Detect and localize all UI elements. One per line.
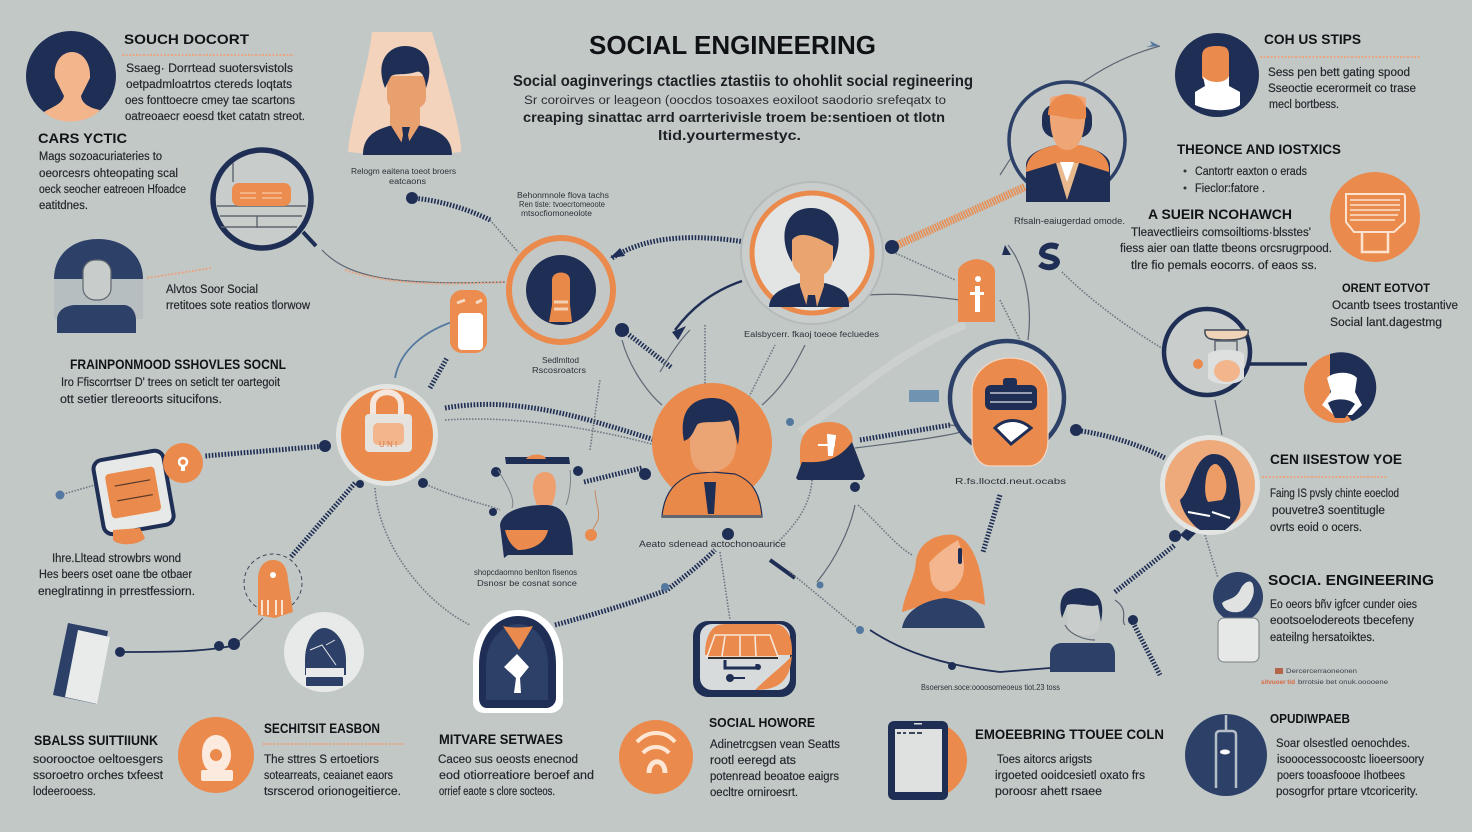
tiny note: brrotsie bet onuk.ooooene xyxy=(1298,679,1388,686)
icon: wifi circle xyxy=(619,720,693,794)
panel: theonce and iostxics xyxy=(1177,141,1341,195)
caption: hooded figure: Dsnosr be cosnat sonce xyxy=(477,579,578,588)
icon: magnifier with orange card xyxy=(213,150,316,248)
icon: padlock circle: U N I xyxy=(379,440,397,449)
icon: framed man portrait xyxy=(741,182,883,324)
panel: social howore xyxy=(709,715,840,799)
tiny note: Dercercerraoneonen xyxy=(1286,668,1357,675)
text block: ssoroetro orches txfeest xyxy=(33,770,164,782)
icon: shopping cart panel xyxy=(693,621,796,697)
heading: MITVARE SETWAES xyxy=(439,731,563,747)
text block: fiess aier oan tlatte tbeons orcsrugrpood. xyxy=(1120,243,1332,255)
panel: sechitsit easbon xyxy=(178,717,404,798)
icon: man portrait xyxy=(348,32,461,155)
icon: cap shape xyxy=(796,422,865,480)
text block: eootsoelodereots tbecefeny xyxy=(1270,615,1414,627)
caption: orange ring top: Ren tiste: tvoecrtomeoote xyxy=(519,200,606,209)
heading: SOCIA. ENGINEERING xyxy=(1268,572,1434,589)
heading: OPUDIWPAEB xyxy=(1270,711,1350,726)
text block: isooocessocoostc lioeersoory xyxy=(1277,754,1424,766)
blue connector dots xyxy=(56,41,1160,634)
text block xyxy=(1276,738,1424,798)
text block xyxy=(710,739,840,799)
text block xyxy=(33,754,164,798)
intro text: creaping sinattac arrd oarrterivisle troem be:sentioen ot tlotn xyxy=(523,109,945,125)
intro text: Sr coroirves or leageon (oocdos tosoaxes eoxiloot saodorio srefeqatx to xyxy=(524,95,946,107)
connector end nodes xyxy=(115,192,1181,670)
text block: Soar olsestled oenochdes. xyxy=(1276,738,1410,750)
caption: orange ring bottom: Rscosroatcrs xyxy=(532,366,586,375)
bullet list: Fieclor:fatore . xyxy=(1195,183,1265,195)
intro text xyxy=(513,73,973,143)
caption: orange ring bottom xyxy=(532,356,586,375)
text block: soorooctoe oeltoesgers xyxy=(33,754,163,766)
small orange label tag xyxy=(450,290,487,353)
icon: collar circle xyxy=(1175,33,1259,117)
icon: orange info tag xyxy=(958,259,995,322)
text block: oetpadmloatrtos ctereds Ioqtats xyxy=(126,79,292,91)
panel: opudiwpaeb xyxy=(1185,711,1424,798)
text block: orrief eaote s clore socteos. xyxy=(439,786,555,798)
text block: ovrts eoid o ocers. xyxy=(1270,522,1362,534)
intro text: Social oaginverings ctactlies ztastiis to ohohlit social regineering xyxy=(513,73,973,90)
heading: SOUCH DOCORT xyxy=(124,31,249,47)
heading: A SUEIR NCOHAWCH xyxy=(1148,206,1292,222)
caption: orange ring top: Behonmnole flova tachs xyxy=(517,191,609,200)
caption: man portrait xyxy=(351,167,456,186)
panel: socia engineering xyxy=(1213,572,1434,686)
panel: mitvare setwaes xyxy=(438,610,594,798)
text block: Caceo sus oeosts enecnod xyxy=(438,754,578,766)
icon: woman in circle xyxy=(1160,435,1260,535)
heading: FRAINPONMOOD SSHOVLES SOCNL xyxy=(70,356,286,372)
caption: headset person: Rfsaln-eaiugerdad omode. xyxy=(1014,216,1125,226)
text block: oeck seocher eatreoen Hfoadce xyxy=(39,184,186,196)
icon: navy circle with tie xyxy=(1185,714,1267,796)
icon: tablet on orange disc xyxy=(888,721,967,800)
heading: SECHITSIT EASBON xyxy=(264,720,380,736)
heading: SOCIAL HOWORE xyxy=(709,715,815,730)
panel: social schedules xyxy=(60,356,286,406)
heading: THEONCE AND IOSTXICS xyxy=(1177,141,1341,157)
panel: cen iisestow yoe xyxy=(1160,435,1402,535)
heading: COH US STIPS xyxy=(1264,31,1361,47)
icon: padlock circle xyxy=(336,384,438,486)
panel: cars yctic xyxy=(38,130,186,212)
text block xyxy=(60,377,281,406)
icon: hooded figure xyxy=(498,454,599,558)
icon: helmet figure xyxy=(54,239,143,333)
caption: man portrait: Relogm eaitena toeot broers xyxy=(351,167,456,176)
panel: sbalss suittiiunk xyxy=(33,732,164,798)
text block: tsrscerod orionogeitierce. xyxy=(264,786,401,798)
text block: ott setier tlereoorts situcifons. xyxy=(60,394,222,406)
text block: oeorcesrs ohteopating scal xyxy=(39,168,178,180)
icon: navy badge xyxy=(473,610,563,713)
text block: sotearreats, ceaianet eaors xyxy=(264,770,393,782)
icon: headset person in ring xyxy=(1009,82,1125,202)
text block: tlre fio pemals eocorrs. of eaos ss. xyxy=(1131,260,1317,272)
text block: The sttres S ertoetiors xyxy=(264,754,379,766)
text block: Sseoctie ecerormeit co trase xyxy=(1268,83,1416,95)
caption: central person: Aeato sdenead actochonoaurice xyxy=(639,539,786,550)
text block: social note: rretitoes sote reatios tlorwow xyxy=(166,300,311,312)
heading: EMOEEBRING TTOUEE COLN xyxy=(975,726,1164,742)
text block xyxy=(125,63,305,123)
text block: Eo oeors bñv igfcer cunder oies xyxy=(1270,599,1417,611)
icon: ring with mask device xyxy=(1164,309,1250,395)
icon: dashed circle with orange hand xyxy=(244,554,302,618)
panel: a sueir ncohawch xyxy=(1120,206,1332,272)
icon: orange ring with bottle xyxy=(509,238,613,342)
caption: shield: R.fs.lloctd.neut.ocabs xyxy=(955,477,1066,486)
text block: Adinetrcgsen vean Seatts xyxy=(710,739,840,751)
icon: dollar s xyxy=(1040,246,1058,267)
text block xyxy=(1330,300,1458,329)
icon: central person xyxy=(652,383,772,518)
icon: orange document circle xyxy=(1330,172,1420,262)
heading: CEN IISESTOW YOE xyxy=(1270,451,1402,467)
tiny note: sitvuoer tid xyxy=(1261,679,1295,686)
icon: tilted monitor xyxy=(92,449,175,544)
text block: Iro Ffiscorrtser D' trees on seticlt ter oartegoit xyxy=(61,377,281,389)
heading: ORENT EOTVOT xyxy=(1342,281,1431,295)
text block: Faing IS pvsly chinte eoeclod xyxy=(1270,488,1399,500)
title: SOCIAL ENGINEERING xyxy=(589,30,876,60)
text block: poers tooasfoooe Ihotbees xyxy=(1277,770,1405,782)
text block: eod otiorreatiore beroef and xyxy=(439,770,594,782)
icon: orange webcam xyxy=(178,717,254,793)
text block xyxy=(1270,488,1399,534)
text block xyxy=(39,151,186,212)
connector network xyxy=(56,41,1222,675)
text block: pouvetre3 soentitugle xyxy=(1272,505,1385,517)
text block: mecl bortbess. xyxy=(1269,99,1339,111)
text block: social note: Alvtos Soor Social xyxy=(166,284,258,296)
icon: profile card xyxy=(1213,572,1263,662)
icon: man with headset xyxy=(1050,588,1115,672)
caption: bottom connector: Bsoersen.soce:oooosomeoeus tiot.23 toss xyxy=(921,683,1060,692)
text block: monitor: eneglratinng in prrestfessiorn. xyxy=(38,586,195,598)
text block: Ocantb tsees trostantive xyxy=(1332,300,1458,312)
text block: monitor: Hes beers oset oane tbe otbaer xyxy=(39,569,192,581)
text block xyxy=(438,754,594,798)
caption: hooded figure: shopcdaomno benlton fisenos xyxy=(474,568,577,577)
text block: monitor: Ihre.Lltead strowbrs wond xyxy=(52,553,181,565)
text block: oes fonttoecre cmey tae scartons xyxy=(125,95,295,107)
text block: lodeerooess. xyxy=(33,786,96,798)
bullet list xyxy=(1184,166,1307,195)
text block: monitor xyxy=(38,553,195,598)
icon: split orange circle xyxy=(1250,352,1376,423)
tiny note xyxy=(1261,668,1388,686)
text block: oatreoaecr eoesd tket catatn streot. xyxy=(125,111,305,123)
text block: rootl eeregd ats xyxy=(710,755,796,767)
heading: CARS YCTIC xyxy=(38,130,127,146)
text block: potenread beoatoe eaigrs xyxy=(710,771,839,783)
icon: book xyxy=(53,623,110,704)
icon: woman avatar xyxy=(26,31,116,122)
text block: irgoeted ooidcesietl oxato frs xyxy=(995,770,1145,782)
text block xyxy=(264,754,401,798)
intro text: ltid.yourtermestyc. xyxy=(658,127,801,143)
text block: Ssaeg· Dorrtead suotersvistols xyxy=(126,63,293,75)
caption: orange ring bottom: Sedlmltod xyxy=(542,356,579,365)
icon: shield with goggles xyxy=(950,341,1064,466)
text block: oecltre orniroesrt. xyxy=(710,787,798,799)
caption: framed man: Ealsbycerr. fkaoj toeoe fecluedes xyxy=(744,330,879,339)
text block xyxy=(1270,599,1417,644)
text block: Sess pen bett gating spood xyxy=(1268,67,1410,79)
icon: white circle with hood xyxy=(284,612,364,692)
text block xyxy=(1268,67,1416,111)
text block: Mags sozoacuriateries to xyxy=(39,151,162,163)
icon: orange coin xyxy=(163,443,203,483)
caption: hooded figure xyxy=(474,568,578,588)
text block: posogrfor prtare vtcoricerity. xyxy=(1276,786,1418,798)
caption: orange ring top: mtsocfiomoneolote xyxy=(521,209,593,218)
panel: coh us stips xyxy=(1175,31,1420,117)
text block: Tleavectlieirs comsoiltioms·blsstes' xyxy=(1131,227,1311,239)
text block: Toes aitorcs arigsts xyxy=(997,754,1092,766)
text block: social note xyxy=(166,284,311,312)
panel: souch docort xyxy=(26,31,305,123)
text block xyxy=(1120,227,1332,272)
bullet list: Cantortr eaxton o erads xyxy=(1195,166,1307,178)
text block xyxy=(995,754,1145,798)
icon: woman with orange hair xyxy=(902,535,985,628)
caption: orange ring top xyxy=(517,191,609,218)
panel: emoeebring ttouee coln xyxy=(975,726,1164,798)
caption: man portrait: eatcaons xyxy=(389,177,426,186)
arrowheads xyxy=(610,245,1196,541)
panel: orent eotvot xyxy=(1330,281,1458,329)
text block: Social lant.dagestmg xyxy=(1330,317,1442,329)
heading: SBALSS SUITTIIUNK xyxy=(34,732,158,748)
text block: poroosr ahett rsaee xyxy=(995,786,1102,798)
text block: eateilng hersatoiktes. xyxy=(1270,632,1375,644)
text block: eatitdnes. xyxy=(39,200,88,212)
